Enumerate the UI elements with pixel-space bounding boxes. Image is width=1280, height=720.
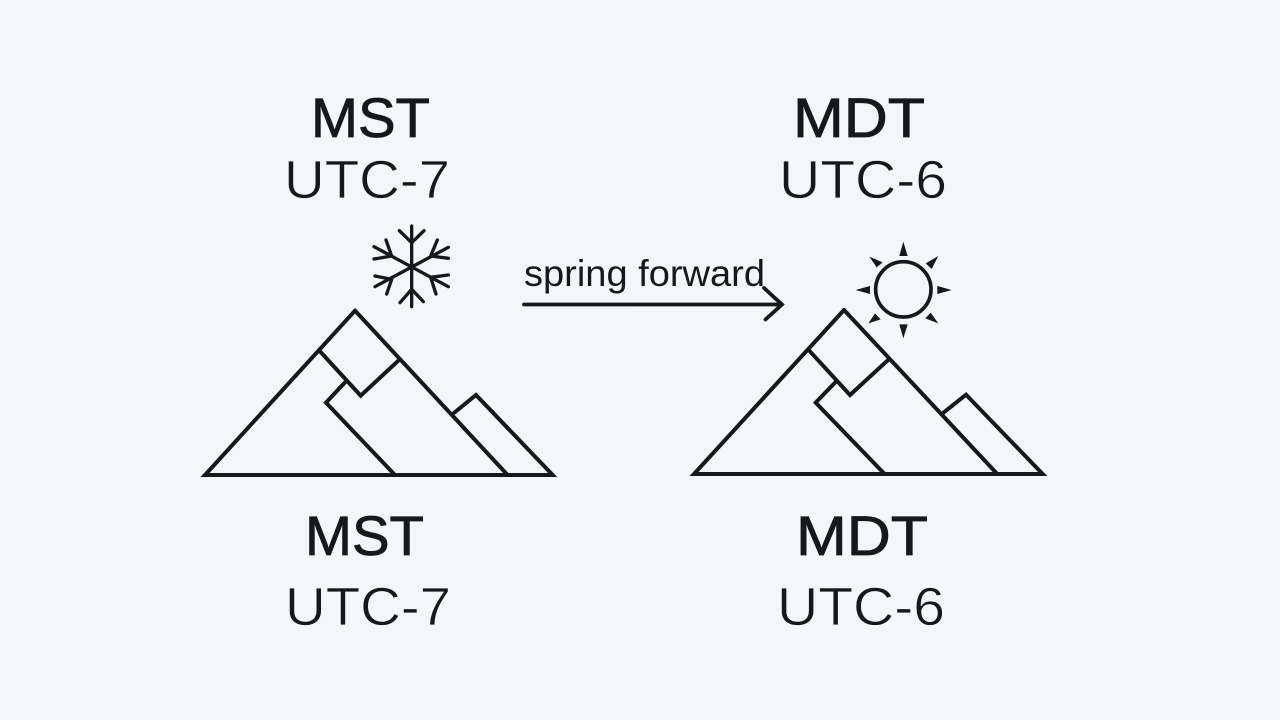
icon: snowflake (374, 226, 448, 307)
icon: left mountain (205, 311, 553, 475)
heading: MST top: MST (311, 86, 430, 149)
text: UTC-7 top: UTC-7 (284, 150, 450, 210)
heading: MST bottom: MST (305, 504, 424, 567)
label: spring forward: spring forward (524, 253, 765, 294)
icon: sun (856, 242, 952, 338)
text: UTC-6 top: UTC-6 (779, 150, 947, 210)
text: UTC-6 bottom: UTC-6 (777, 577, 945, 637)
heading: MDT bottom: MDT (796, 504, 928, 567)
arrow: spring forward (524, 288, 782, 320)
icon: right mountain (694, 310, 1043, 474)
heading: MDT top: MDT (793, 86, 925, 149)
text: UTC-7 bottom: UTC-7 (285, 577, 451, 637)
